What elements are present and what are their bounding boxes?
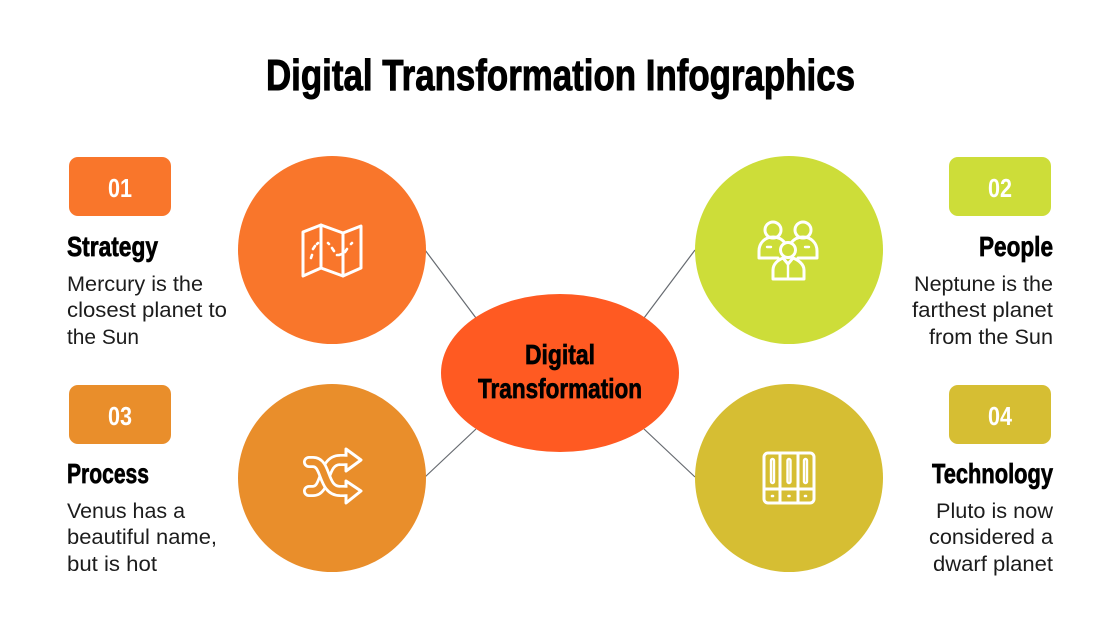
panel: strategy: Mercury is the	[67, 273, 203, 296]
panel: technology: Pluto is now	[936, 500, 1054, 523]
panel: technology	[929, 385, 1054, 576]
connector lines	[425, 250, 695, 477]
panel: technology: considered a	[929, 526, 1053, 549]
panel: technology: 04	[988, 401, 1012, 431]
panel: people: Neptune is the	[914, 273, 1053, 296]
panel: strategy: closest planet to	[67, 299, 227, 322]
panel: central node: Digital	[525, 339, 595, 370]
icon: binders	[764, 453, 814, 503]
circle: people	[695, 156, 883, 344]
icon: people	[759, 222, 817, 279]
icon: shuffle	[309, 449, 361, 503]
panel: strategy: the Sun	[67, 326, 139, 349]
icon: map	[303, 225, 361, 276]
title: Digital Transformation Infographics	[266, 51, 855, 100]
panel: central node	[441, 294, 679, 452]
panel: people: from the Sun	[929, 326, 1053, 349]
panel: process: but is hot	[67, 553, 157, 576]
panel: strategy: 01	[108, 173, 132, 203]
panel: process: 03	[108, 401, 132, 431]
panel: central node: Transformation	[478, 373, 642, 404]
circle: technology	[695, 384, 883, 572]
panel: people: farthest planet	[912, 299, 1053, 322]
panel: strategy: Strategy	[67, 231, 158, 262]
panel: process: Venus has a	[67, 500, 185, 523]
circle: process	[238, 384, 426, 572]
panel: people: People	[979, 231, 1053, 262]
circle: strategy	[238, 156, 426, 344]
panel: technology: dwarf planet	[933, 553, 1053, 576]
panel: people	[912, 157, 1053, 349]
panel: process: Process	[67, 458, 149, 489]
panel: process	[67, 385, 217, 576]
panel: people: 02	[988, 173, 1012, 203]
panel: technology: Technology	[932, 458, 1053, 489]
panel: strategy	[67, 157, 227, 349]
panel: process: beautiful name,	[67, 526, 217, 549]
